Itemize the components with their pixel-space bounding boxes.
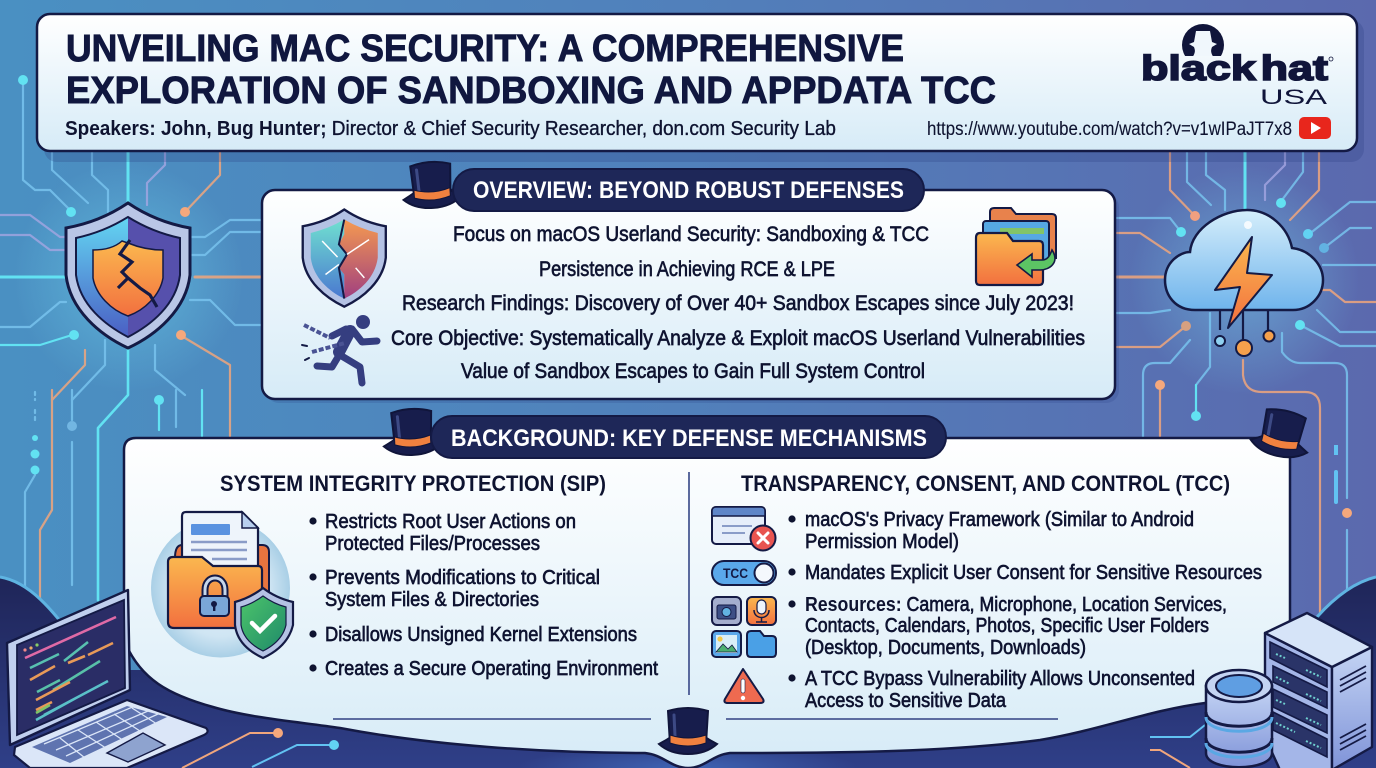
- video url: https://www.youtube.com/watch?v=v1wIPaJT7x8: [927, 119, 1292, 140]
- heading: TCC: TRANSPARENCY, CONSENT, AND CONTROL (TCC): [741, 471, 1230, 496]
- column: TCC: [712, 471, 1262, 712]
- icon: folders with green arrow: [976, 208, 1056, 285]
- SIP bullet list: Disallows Unsigned Kernel Extensions: [325, 624, 637, 646]
- panel: overview: [262, 190, 1119, 403]
- icon: cracked shield: [303, 210, 386, 307]
- TCC bullet list: macOS's Privacy Framework (Similar to Android: [805, 509, 1194, 531]
- title line 2: EXPLORATION OF SANDBOXING AND APPDATA TCC: [66, 70, 996, 112]
- icon: TCC toggle: [712, 561, 776, 585]
- SIP bullet list: Restricts Root User Actions on: [325, 511, 576, 533]
- icon: locked folder with shield: [151, 512, 293, 658]
- icon: cloud with lightning: [1165, 210, 1323, 356]
- TCC bullet list: A TCC Bypass Vulnerability Allows Unconsented: [805, 668, 1195, 690]
- panel: overview: Value of Sandbox Escapes to Gain Full System Control: [461, 360, 925, 383]
- icon: TCC toggle: TCC: [723, 565, 748, 581]
- icon: database: [1206, 670, 1272, 767]
- icon: server rack: [1265, 613, 1372, 768]
- SIP bullet list: Protected Files/Processes: [325, 533, 540, 555]
- TCC bullet list: [788, 509, 1262, 712]
- TCC bullet list: Permission Model): [805, 531, 959, 553]
- panel: overview: Core Objective: Systematically Analyze & Exploit macOS Userland Vulnerabilities: [391, 327, 1085, 350]
- logo: black hat USA: USA: [1260, 86, 1327, 109]
- dark hills at bottom: [0, 577, 1376, 768]
- icon: microphone: [747, 597, 776, 625]
- SIP bullet list: Creates a Secure Operating Environment: [325, 658, 658, 680]
- heading: background: BACKGROUND: KEY DEFENSE MECHANISMS: [451, 425, 927, 452]
- panel: background: [124, 438, 1290, 768]
- icon: camera: [712, 597, 741, 625]
- heading: background: [431, 416, 946, 458]
- icon: laptop with code: [7, 590, 208, 768]
- logo: black hat USA: [1141, 24, 1333, 109]
- speakers: Speakers: John, Bug Hunter; Director & Chief Security Researcher, don.com Security Lab: [65, 117, 836, 140]
- icon: window with error: [712, 507, 776, 550]
- icon: top hat right corner: [1248, 404, 1315, 462]
- title line 1: UNVEILING MAC SECURITY: A COMPREHENSIVE: [66, 28, 904, 70]
- icon: top hat background: [382, 407, 442, 456]
- TCC bullet list: Resources: Camera, Microphone, Location Services,: [805, 594, 1227, 616]
- SIP bullet list: Prevents Modifications to Critical: [325, 567, 600, 589]
- icon: warning triangle: [724, 669, 764, 703]
- logo: black hat USA: black hat: [1141, 49, 1328, 88]
- TCC bullet list: Contacts, Calendars, Photos, Specific User Folders: [805, 615, 1209, 637]
- heading: SIP: SYSTEM INTEGRITY PROTECTION (SIP): [220, 471, 606, 496]
- TCC bullet list: Access to Sensitive Data: [805, 690, 1007, 712]
- panel: overview: Research Findings: Discovery of Over 40+ Sandbox Escapes since July 2023!: [402, 292, 1074, 315]
- circuit board lines: [0, 75, 1376, 620]
- overview text: Focus on macOS Userland Security: Sandboxing & TCC: [453, 223, 929, 246]
- column: SIP: [151, 471, 658, 680]
- heading: overview: [453, 169, 924, 211]
- icon: folder: [747, 631, 776, 657]
- icon: running figure breaking chains: [302, 315, 377, 383]
- SIP bullet list: [309, 511, 658, 680]
- icon: top hat overview: [401, 160, 462, 210]
- icon: photo: [712, 631, 741, 657]
- title panel: [37, 14, 1364, 162]
- panel: overview: Persistence in Achieving RCE & LPE: [539, 258, 835, 281]
- icon: top hat bottom: [659, 708, 717, 754]
- TCC bullet list: Mandates Explicit User Consent for Sensitive Resources: [805, 562, 1262, 584]
- TCC bullet list: (Desktop, Documents, Downloads): [805, 637, 1086, 659]
- SIP bullet list: System Files & Directories: [325, 589, 539, 611]
- icon: broken shield (large): [66, 203, 190, 348]
- heading: overview: OVERVIEW: BEYOND ROBUST DEFENSES: [473, 177, 904, 204]
- icon: youtube play: [1299, 117, 1331, 139]
